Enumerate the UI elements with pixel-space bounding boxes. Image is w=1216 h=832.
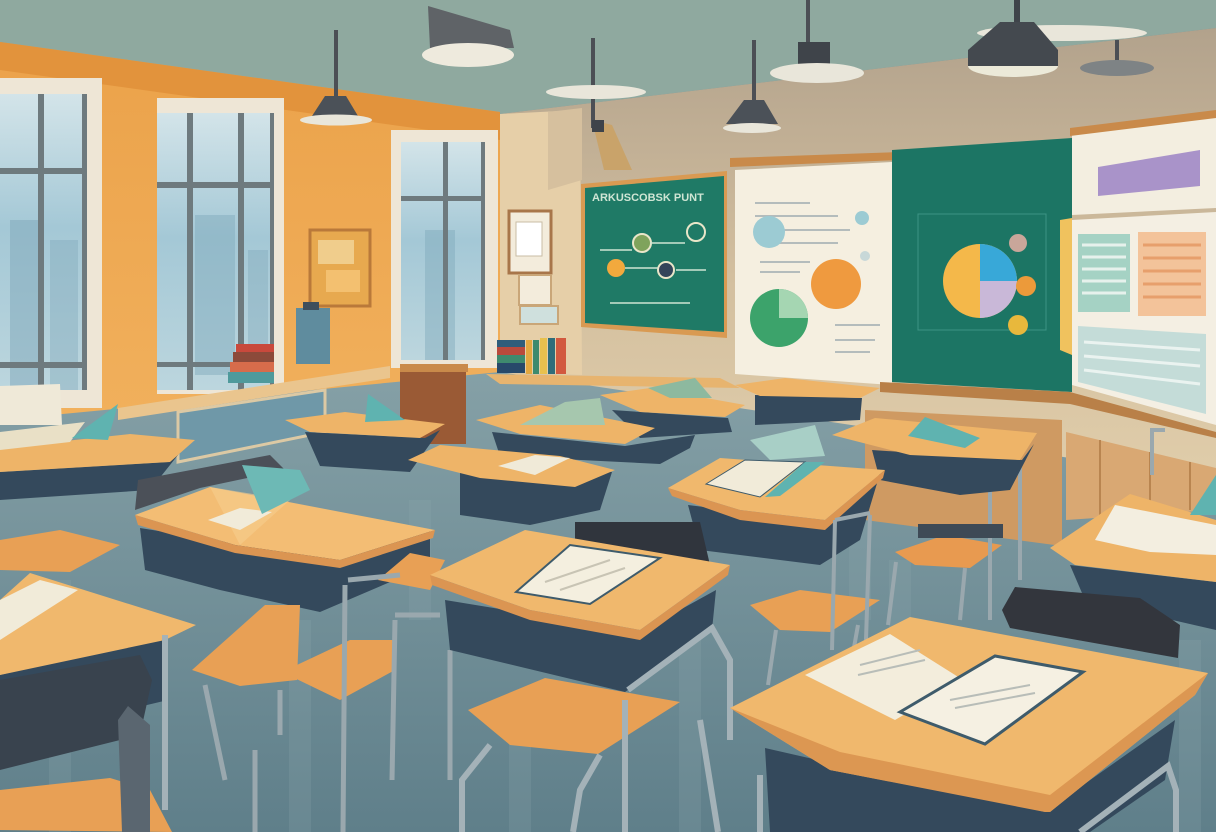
poster: pie charts — [735, 162, 892, 385]
chair: left foreground — [0, 655, 172, 832]
desk: rear left — [285, 394, 445, 472]
left orange chair seat — [0, 530, 120, 572]
ceiling lamps — [300, 0, 1154, 170]
back row desks — [0, 378, 1165, 625]
board ledge — [880, 382, 1216, 438]
desk: back right — [735, 378, 880, 425]
lamp 6 — [968, 0, 1147, 77]
desk: foreground right with book — [730, 617, 1208, 832]
chair back: foreground right — [1002, 587, 1180, 658]
desk: middle right with book — [668, 425, 885, 565]
desk: back center — [600, 378, 745, 438]
window: middle — [157, 98, 284, 394]
desk: left foreground — [0, 573, 196, 810]
stack of books on sill — [228, 344, 274, 383]
lamp 3 — [546, 38, 646, 170]
lamp 5 — [770, 0, 864, 83]
chair: center foreground — [462, 628, 730, 832]
lamp 4 — [723, 40, 781, 133]
desk: left middle with book — [135, 455, 435, 612]
lamp 2 — [422, 6, 514, 67]
green chalkboard: left — [581, 171, 727, 338]
blue organizer on sill — [296, 302, 330, 364]
desk: center — [408, 445, 615, 525]
bookshelf and books — [400, 338, 740, 444]
chairs: lower middle — [192, 553, 450, 832]
ceiling — [0, 0, 1216, 114]
desk: center back — [476, 398, 695, 464]
desk: center with book — [430, 522, 730, 692]
framed certificates — [509, 211, 558, 324]
poster: tables and charts — [1060, 110, 1216, 425]
chair: middle right — [750, 513, 880, 685]
floor — [0, 360, 1216, 832]
window: right — [391, 130, 498, 368]
desk: far left — [0, 384, 195, 500]
desk: right edge with open book — [1050, 475, 1216, 630]
desk: right — [832, 417, 1165, 495]
wall notice board — [310, 230, 370, 306]
window: left — [0, 78, 102, 408]
orange side wall — [0, 42, 500, 420]
chair: right seat — [888, 468, 1020, 625]
window sill and radiator — [118, 366, 390, 462]
orange board rail — [730, 152, 900, 167]
green chalkboard: pie chart — [892, 138, 1072, 392]
lamp 7 — [1080, 40, 1154, 76]
green chalkboard: left: ARKUSCOBSK PUNT — [592, 192, 704, 204]
lamp 1 — [300, 30, 372, 126]
beige back wall — [500, 28, 1216, 480]
wood wainscot — [865, 410, 1216, 546]
